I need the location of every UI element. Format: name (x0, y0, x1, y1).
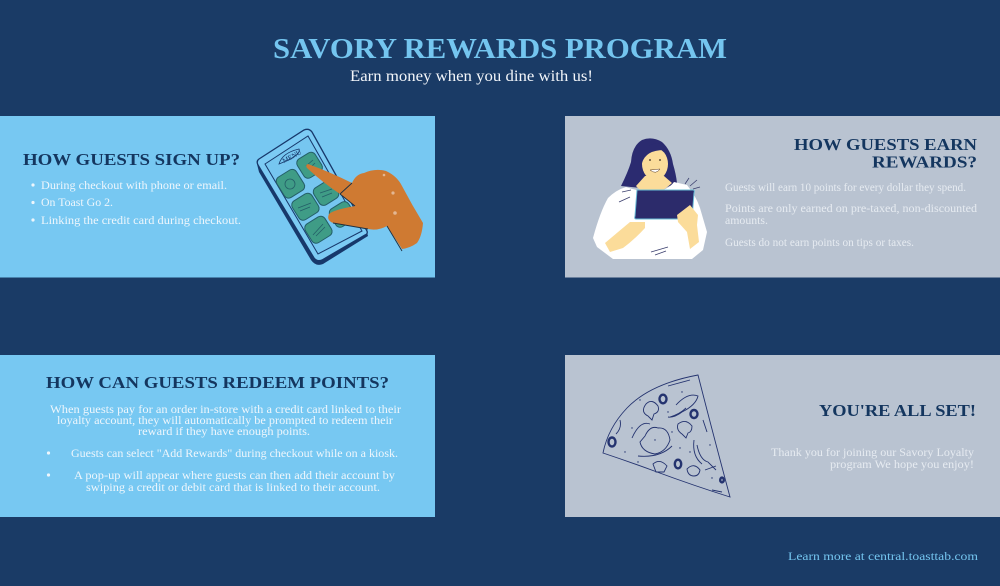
heading: earn rewards (794, 135, 978, 172)
text: redeem intro: loyalty account, they will automatically be prompted to redeem their (57, 415, 393, 427)
text: earn rules: amounts. (725, 215, 768, 227)
list: sign up methods: During checkout with phone or email. (41, 180, 227, 192)
panel: you're all set (565, 355, 1000, 517)
footer link: Learn more at central.toasttab.com (788, 549, 979, 563)
icon: hand tapping a tablet menu: MENU (281, 148, 303, 165)
text: earn rules: Guests do not earn points on tips or taxes. (725, 237, 914, 249)
list: sign up methods (31, 180, 241, 227)
text: redeem intro: reward if they have enough points. (138, 426, 310, 438)
text: earn rules (725, 182, 977, 249)
text: thank you (771, 447, 974, 471)
heading: redeem points: HOW CAN GUESTS REDEEM POINTS? (46, 373, 389, 392)
subtitle: Earn money when you dine with us! (350, 68, 593, 85)
text: thank you: Thank you for joining our Savory Loyalty (771, 447, 974, 459)
heading: sign up: HOW GUESTS SIGN UP? (23, 150, 240, 169)
text: earn rules: Points are only earned on pre-taxed, non-discounted (725, 203, 977, 215)
title: SAVORY REWARDS PROGRAM (273, 33, 727, 65)
list: redeem steps: Guests can select "Add Rewards" during checkout while on a kiosk. (71, 448, 398, 460)
icon: hand tapping a tablet menu (257, 129, 423, 265)
list: sign up methods: Linking the credit card during checkout. (41, 215, 241, 227)
list: redeem steps: swiping a credit or debit card that is linked to their account. (86, 482, 380, 494)
icon: woman holding a tablet (593, 138, 707, 259)
list: redeem steps (47, 448, 398, 494)
panel: how guests earn rewards (565, 116, 1000, 278)
list: sign up methods: On Toast Go 2. (41, 197, 113, 209)
panel: how can guests redeem points (0, 355, 435, 517)
heading: earn rewards: HOW GUESTS EARN (794, 135, 978, 154)
panel: how guests sign up (0, 116, 435, 278)
heading: earn rewards: REWARDS? (872, 152, 977, 172)
icon: pizza slice (603, 375, 730, 497)
text: thank you: program We hope you enjoy! (830, 459, 974, 471)
text: earn rules: Guests will earn 10 points for every dollar they spend. (725, 182, 966, 194)
text: redeem intro: When guests pay for an order in-store with a credit card linked to their (50, 404, 401, 416)
text: redeem intro (50, 404, 401, 438)
list: redeem steps: A pop-up will appear where guests can then add their account by (74, 470, 395, 482)
heading: all set: YOU'RE ALL SET! (819, 401, 976, 420)
